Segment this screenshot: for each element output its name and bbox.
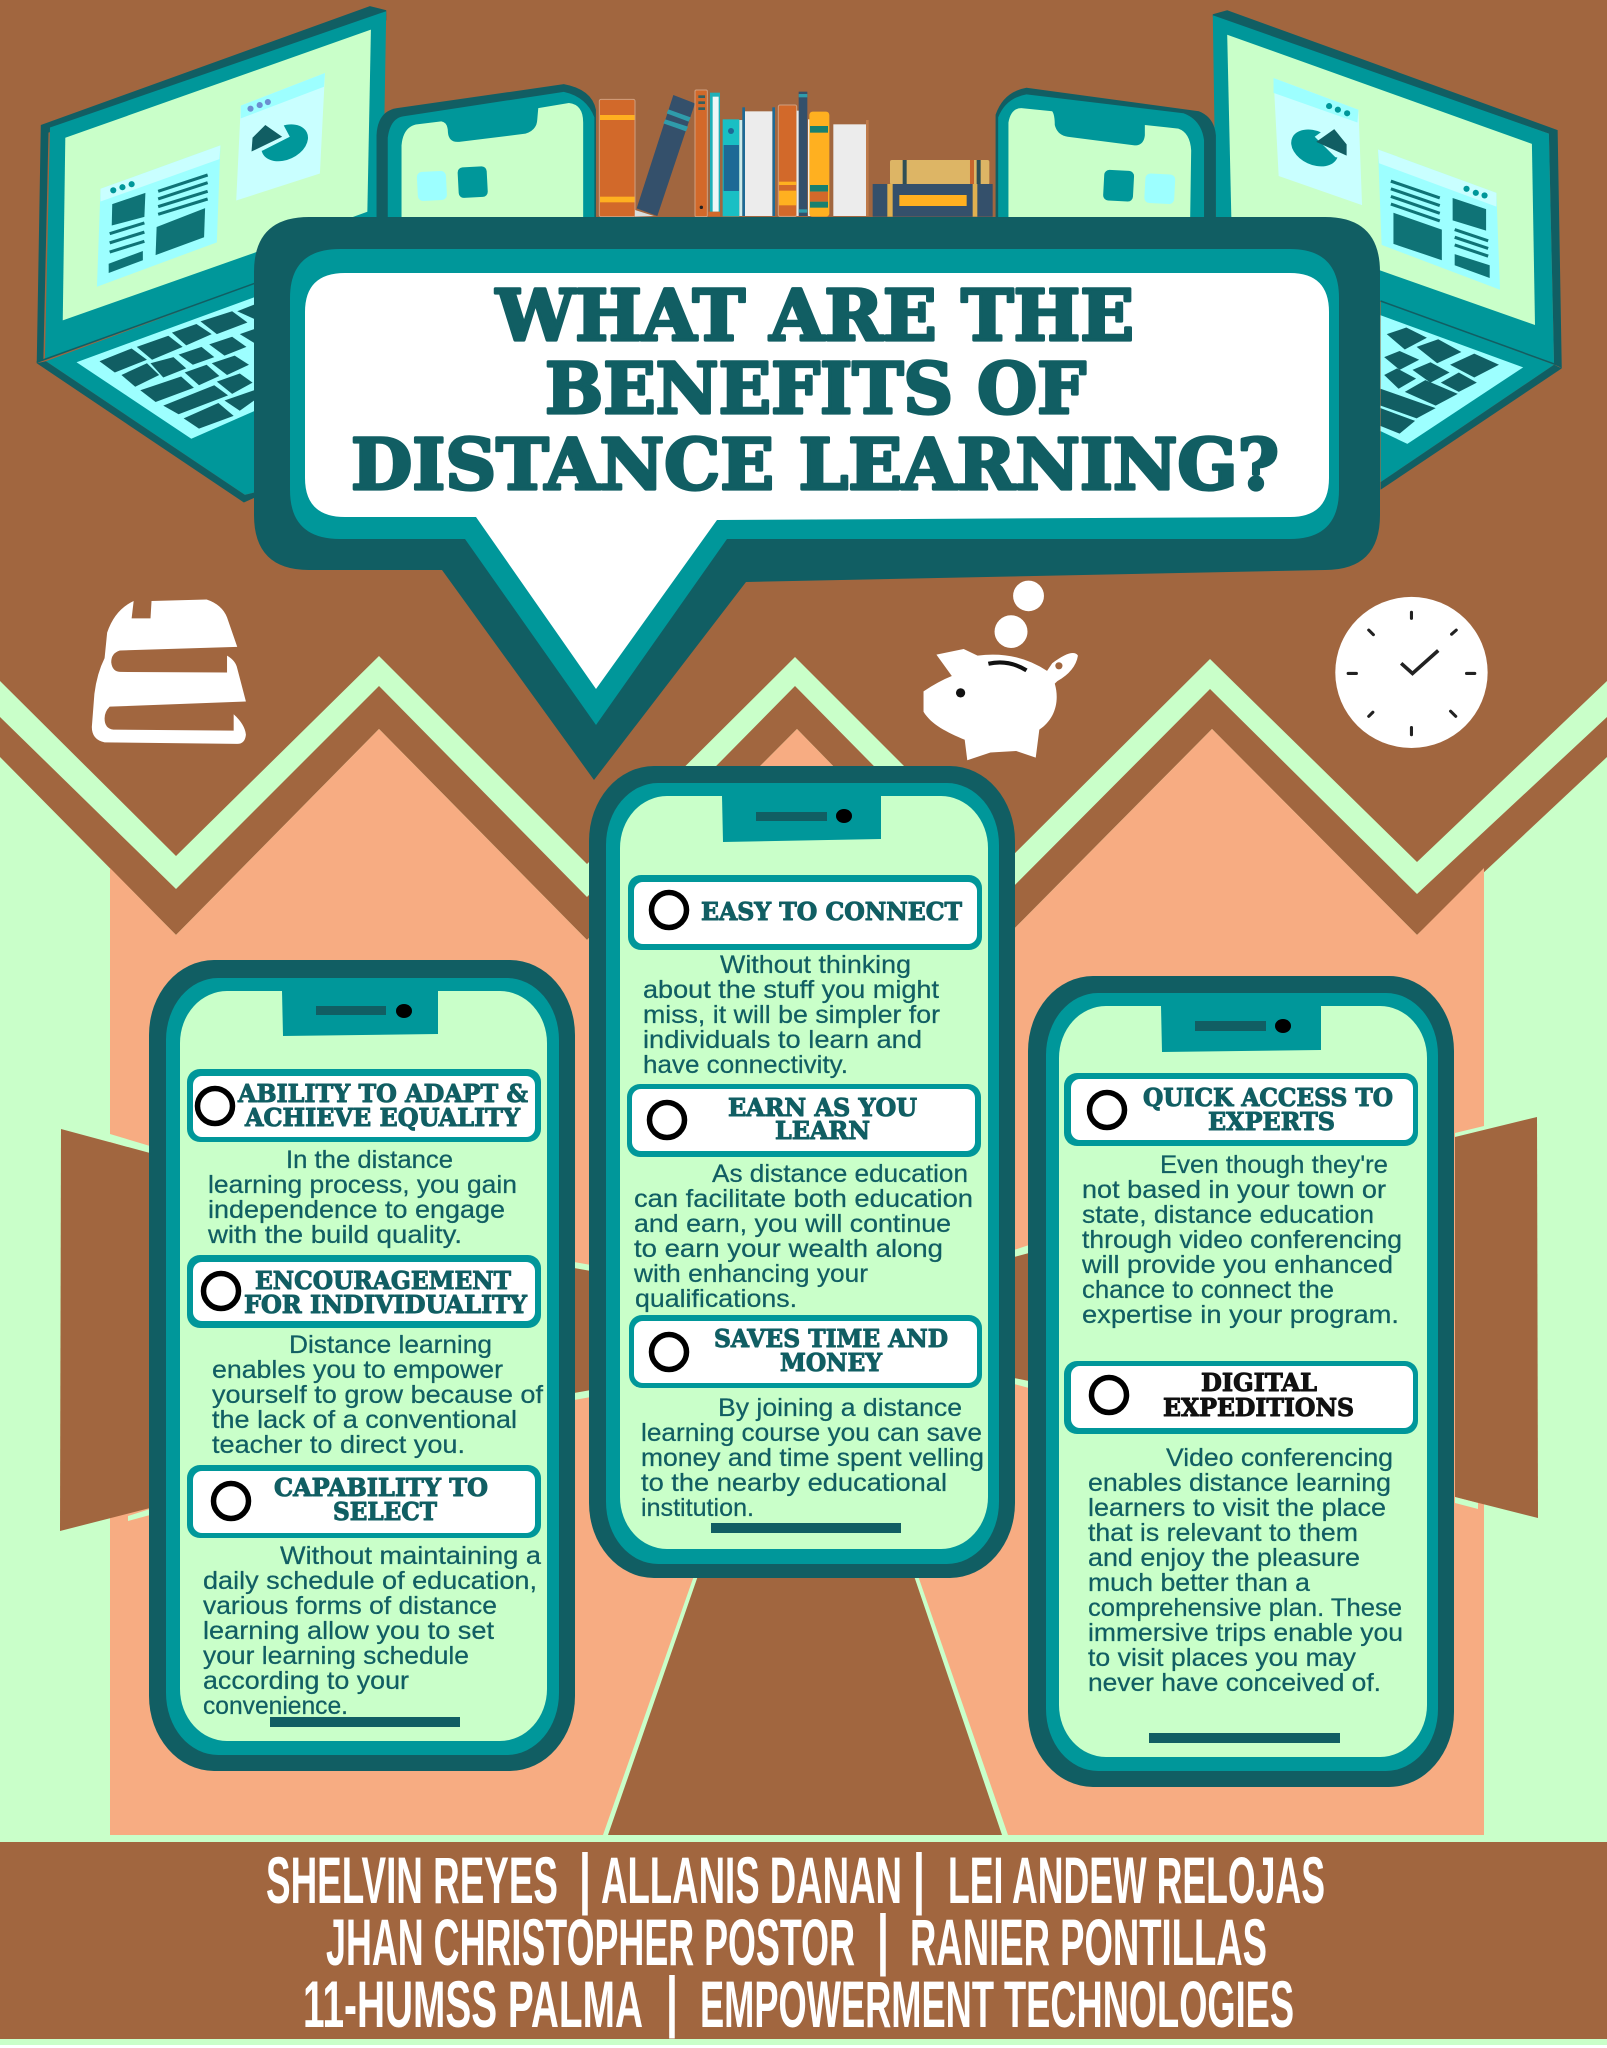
text: digital expeditions body: enables distance learning (1088, 1469, 1391, 1497)
text: quick access body: expertise in your program. (1082, 1301, 1399, 1329)
text: encouragement body: enables you to empower (212, 1356, 503, 1384)
text: earn body: with enhancing your (633, 1260, 868, 1288)
panel: footer credits: ALLANIS DANAN (601, 1843, 902, 1917)
text: saves body: to the nearby educational (641, 1469, 947, 1497)
title: BENEFITS OF (545, 347, 1086, 430)
text: quick access body: state, distance education (1082, 1201, 1374, 1229)
road trapezoid (603, 1570, 1008, 1835)
text: ability body (207, 1146, 517, 1249)
text: capability body: various forms of distance (203, 1592, 497, 1620)
text: ability body: with the build quality. (207, 1221, 462, 1249)
text: digital expeditions body: that is relevant to them (1088, 1519, 1358, 1547)
card: ability to adapt: ACHIEVE EQUALITY (244, 1103, 521, 1132)
text: earn body: qualifications. (635, 1285, 797, 1313)
card: capability to select (187, 1465, 541, 1538)
text: easy to connect body (643, 951, 940, 1079)
text: quick access body: through video conferencing (1082, 1226, 1402, 1254)
card: easy to connect: EASY TO CONNECT (701, 897, 962, 926)
text: quick access body: Even though they're (1160, 1151, 1388, 1179)
panel: footer credits: | (576, 1840, 594, 1916)
text: digital expeditions body: much better than a (1088, 1569, 1310, 1597)
panel: footer credits: SHELVIN REYES (266, 1843, 558, 1917)
text: quick access body: not based in your town or (1082, 1176, 1386, 1204)
text: digital expeditions body: to visit places you may (1088, 1644, 1357, 1672)
text: easy to connect body: individuals to learn and (643, 1026, 922, 1054)
text: digital expeditions body: and enjoy the pleasure (1088, 1544, 1360, 1572)
text: easy to connect body: have connectivity. (643, 1051, 848, 1079)
card: earn as you learn: LEARN (775, 1116, 870, 1145)
card: encouragement: ENCOURAGEMENT (255, 1266, 511, 1295)
text: capability body: your learning schedule (203, 1642, 469, 1670)
text: digital expeditions body: comprehensive plan. These (1088, 1594, 1402, 1622)
icon: right small phone (996, 88, 1216, 219)
card: digital expeditions: DIGITAL (1201, 1368, 1317, 1397)
card: saves time and money: SAVES TIME AND (714, 1324, 948, 1353)
text: encouragement body: the lack of a conventional (212, 1406, 517, 1434)
panel: zigzag background (0, 656, 1607, 2048)
panel: footer credits: JHAN CHRISTOPHER POSTOR (326, 1905, 855, 1979)
icon: left small phone (377, 84, 596, 219)
card: capability to select: CAPABILITY TO (274, 1473, 488, 1502)
text: earn body: can facilitate both education (634, 1185, 973, 1213)
text: easy to connect body: Without thinking (720, 951, 911, 979)
title: WHAT ARE THE (495, 274, 1134, 357)
text: capability body: daily schedule of education, (203, 1567, 537, 1595)
card: quick access to experts: QUICK ACCESS TO (1143, 1083, 1393, 1112)
text: digital expeditions body: never have conceived of. (1088, 1669, 1381, 1697)
text: digital expeditions body: Video conferencing (1166, 1444, 1393, 1472)
text: earn body: As distance education (712, 1160, 968, 1188)
text: quick access body (1081, 1151, 1402, 1329)
card: ability to adapt (187, 1069, 541, 1142)
text: ability body: learning process, you gain (208, 1171, 517, 1199)
text: saves body: learning course you can save (641, 1419, 982, 1447)
panel: right phone (1028, 976, 1454, 1787)
text: digital expeditions body (1088, 1444, 1403, 1697)
text: encouragement body: yourself to grow because of (212, 1381, 543, 1409)
text: saves body (641, 1394, 984, 1522)
card: ability to adapt: ABILITY TO ADAPT & (237, 1079, 528, 1108)
icon: row of books (599, 90, 993, 217)
card: quick access to experts: EXPERTS (1208, 1107, 1335, 1136)
card: earn as you learn (627, 1084, 981, 1157)
panel: footer credits: | (663, 1963, 681, 2039)
panel: footer credits: | (874, 1901, 892, 1977)
panel: left phone (149, 960, 575, 1771)
text: digital expeditions body: learners to visit the place (1088, 1494, 1386, 1522)
text: ability body: independence to engage (208, 1196, 505, 1224)
card: encouragement (187, 1255, 541, 1328)
card: saves time and money: MONEY (780, 1348, 883, 1377)
panel: footer credits (0, 1840, 1607, 2041)
panel: title speech bubble (254, 217, 1380, 780)
text: capability body: convenience. (203, 1692, 348, 1720)
panel: footer credits: 11-HUMSS PALMA (303, 1967, 643, 2041)
title (351, 274, 1279, 506)
icon: left laptop (37, 6, 386, 503)
icon: piggy bank (924, 581, 1078, 760)
text: quick access body: will provide you enhanced (1081, 1251, 1393, 1279)
text: saves body: money and time spent velling (641, 1444, 984, 1472)
card: capability to select: SELECT (333, 1497, 437, 1526)
text: ability body: In the distance (286, 1146, 453, 1174)
card: digital expeditions (1064, 1361, 1418, 1434)
icon: stack of books (92, 599, 246, 744)
panel: footer credits: RANIER PONTILLAS (910, 1905, 1267, 1979)
text: capability body (203, 1542, 541, 1720)
text: capability body: learning allow you to set (203, 1617, 494, 1645)
panel: centre phone (589, 766, 1015, 1578)
panel: footer credits: | (910, 1840, 928, 1916)
card: saves time and money (629, 1315, 982, 1388)
text: easy to connect body: about the stuff you might (643, 976, 939, 1004)
text: earn body: to earn your wealth along (634, 1235, 943, 1263)
text: encouragement body (212, 1331, 543, 1459)
text: saves body: institution. (641, 1494, 754, 1522)
card: quick access to experts (1064, 1073, 1418, 1146)
card: digital expeditions: EXPEDITIONS (1163, 1393, 1354, 1422)
text: easy to connect body: miss, it will be simpler for (643, 1001, 940, 1029)
text: encouragement body: Distance learning (289, 1331, 492, 1359)
card: easy to connect (628, 875, 982, 950)
icon: right laptop (1213, 10, 1562, 490)
text: earn body: and earn, you will continue (634, 1210, 951, 1238)
text: capability body: Without maintaining a (280, 1542, 541, 1570)
card: earn as you learn: EARN AS YOU (728, 1093, 917, 1122)
text: capability body: according to your (203, 1667, 409, 1695)
text: saves body: By joining a distance (718, 1394, 962, 1422)
text: quick access body: chance to connect the (1082, 1276, 1334, 1304)
text: digital expeditions body: immersive trips enable you (1088, 1619, 1403, 1647)
title: DISTANCE LEARNING? (351, 423, 1279, 506)
icon: clock (1335, 597, 1488, 748)
text: encouragement body: teacher to direct you. (212, 1431, 465, 1459)
card: encouragement: FOR INDIVIDUALITY (244, 1290, 528, 1319)
text: earn body (633, 1160, 973, 1313)
